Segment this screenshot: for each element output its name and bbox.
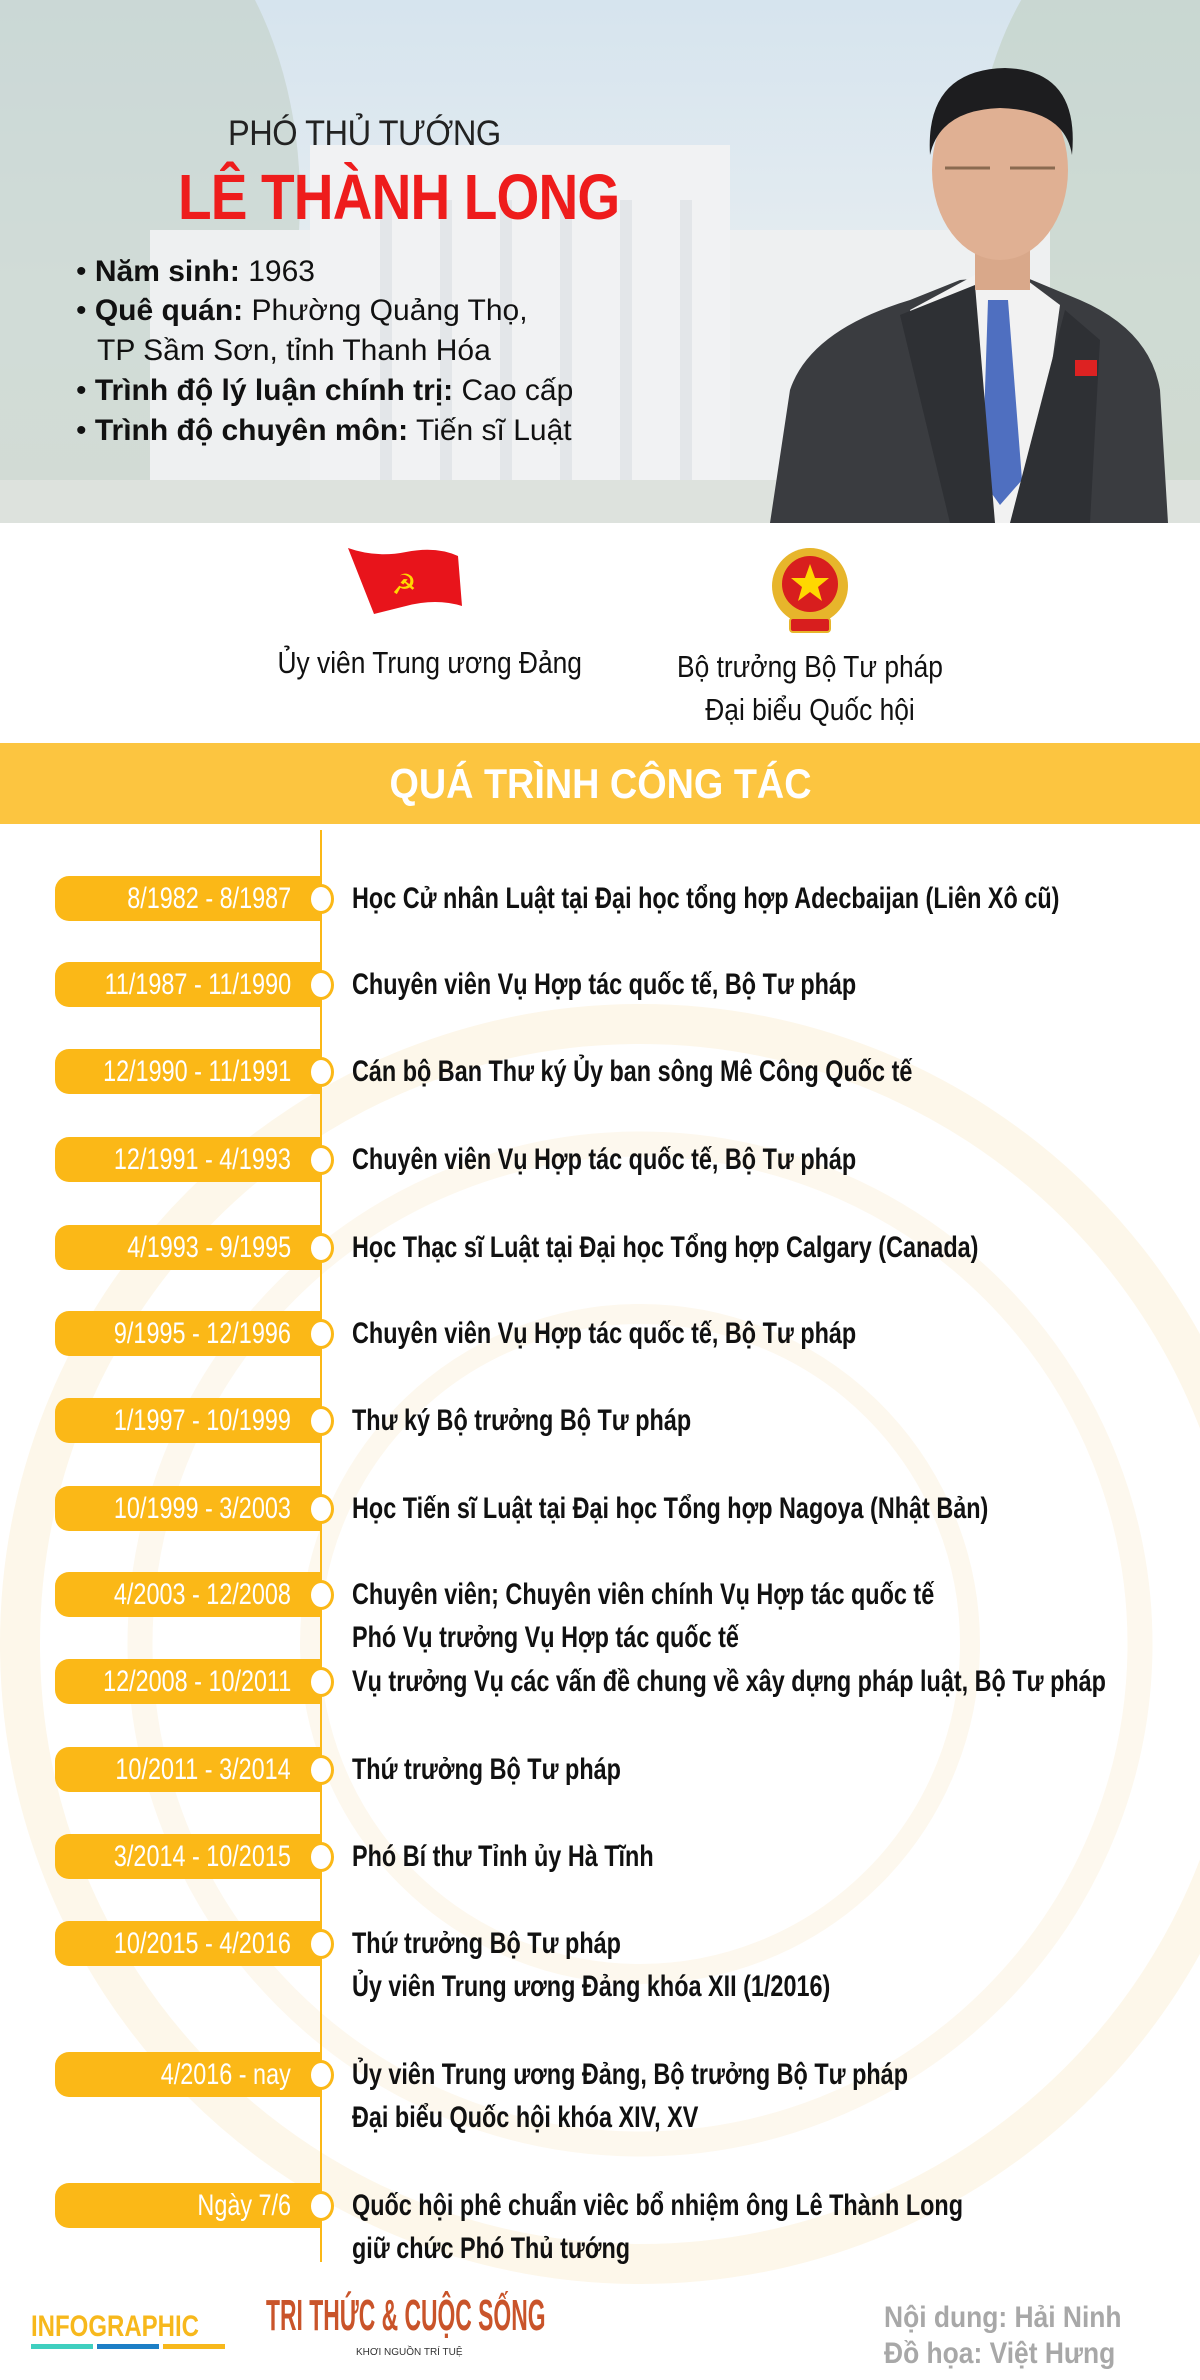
entry 1: 8/1982 - 8/1987	[127, 882, 291, 915]
entry 9: Chuyên viên; Chuyên viên chính Vụ Hợp tác quốc tế	[352, 1578, 934, 1611]
footer: infographic label: INFOGRAPHIC	[31, 2310, 199, 2343]
caption: ministry: Đại biểu Quốc hội	[705, 692, 915, 727]
entry 2	[55, 962, 856, 1007]
title name: LÊ THÀNH LONG	[178, 161, 619, 233]
entry 7: Thư ký Bộ trưởng Bộ Tư pháp	[352, 1404, 691, 1437]
entry 1	[55, 876, 1059, 921]
entry 3: 12/1990 - 11/1991	[103, 1055, 291, 1088]
subtitle: PHÓ THỦ TƯỚNG	[228, 114, 501, 153]
entry 14	[55, 2052, 908, 2134]
caption: ministry: Bộ trưởng Bộ Tư pháp	[677, 649, 943, 684]
section heading band	[0, 743, 1200, 824]
entry 8: 10/1999 - 3/2003	[114, 1492, 291, 1525]
entry 4	[55, 1137, 856, 1182]
entry 8	[55, 1486, 988, 1531]
header photo background	[0, 0, 1200, 523]
bullets: personal info: TP Sầm Sơn, tỉnh Thanh Hóa	[97, 334, 491, 367]
caption: party: Ủy viên Trung ương Đảng	[278, 645, 582, 680]
entry 7: 1/1997 - 10/1999	[114, 1404, 291, 1437]
timeline line	[320, 830, 322, 2262]
entry 14: 4/2016 - nay	[161, 2058, 291, 2091]
entry 1: Học Cử nhân Luật tại Đại học tổng hợp Adecbaijan (Liên Xô cũ)	[352, 882, 1059, 915]
entry 15	[55, 2183, 963, 2265]
icon: party flag: ☭	[391, 568, 417, 601]
entry 13	[55, 1921, 830, 2003]
entry 6	[55, 1311, 856, 1356]
entry 13: Ủy viên Trung ương Đảng khóa XII (1/2016)	[352, 1970, 830, 2003]
bullets: personal info: • Quê quán: Phường Quảng Thọ,	[76, 294, 528, 327]
entry 12: 3/2014 - 10/2015	[114, 1840, 291, 1873]
footer: credits: Nội dung: Hải Ninh	[884, 2301, 1122, 2334]
icon: national emblem	[772, 548, 848, 633]
entry 13: Thứ trưởng Bộ Tư pháp	[352, 1927, 621, 1960]
entry 5	[55, 1225, 978, 1270]
footer: credits	[884, 2301, 1122, 2370]
entry 12: Phó Bí thư Tỉnh ủy Hà Tĩnh	[352, 1840, 654, 1873]
entry 11: 10/2011 - 3/2014	[116, 1753, 291, 1786]
entry 2: Chuyên viên Vụ Hợp tác quốc tế, Bộ Tư pháp	[352, 968, 856, 1001]
entry 8: Học Tiến sĩ Luật tại Đại học Tổng hợp Nagoya (Nhật Bản)	[352, 1492, 988, 1525]
entry 11: Thứ trưởng Bộ Tư pháp	[352, 1753, 621, 1786]
bullets: personal info: • Trình độ lý luận chính trị: Cao cấp	[76, 374, 573, 407]
bullets: personal info: • Năm sinh: 1963	[76, 255, 315, 288]
footer: publication logo: TRI THỨC & CUỘC SỐNG	[266, 2291, 546, 2340]
background watermark	[0, 1004, 1200, 2284]
entry 14: Ủy viên Trung ương Đảng, Bộ trưởng Bộ Tư pháp	[352, 2058, 908, 2091]
bullets: personal info	[76, 255, 573, 447]
entry 14: Đại biểu Quốc hội khóa XIV, XV	[352, 2101, 698, 2134]
footer: credits: Đồ họa: Việt Hưng	[884, 2337, 1115, 2370]
entry 7	[55, 1398, 691, 1443]
entry 4: 12/1991 - 4/1993	[114, 1143, 291, 1176]
entry 4: Chuyên viên Vụ Hợp tác quốc tế, Bộ Tư pháp	[352, 1143, 856, 1176]
entry 15: Quốc hội phê chuẩn viêc bổ nhiệm ông Lê Thành Long	[352, 2189, 963, 2222]
entry 3: Cán bộ Ban Thư ký Ủy ban sông Mê Công Quốc tế	[352, 1055, 912, 1088]
entry 10	[55, 1659, 1106, 1704]
caption: ministry	[677, 649, 943, 727]
entry 12	[55, 1834, 654, 1879]
entry 6: 9/1995 - 12/1996	[114, 1317, 291, 1350]
entry 6: Chuyên viên Vụ Hợp tác quốc tế, Bộ Tư pháp	[352, 1317, 856, 1350]
footer: publication logo: KHƠI NGUỒN TRÍ TUỆ	[356, 2347, 463, 2358]
entry 9: 4/2003 - 12/2008	[114, 1578, 291, 1611]
entry 9: Phó Vụ trưởng Vụ Hợp tác quốc tế	[352, 1621, 739, 1654]
timeline entries	[55, 876, 1106, 2265]
entry 13: 10/2015 - 4/2016	[114, 1927, 291, 1960]
entry 5: Học Thạc sĩ Luật tại Đại học Tổng hợp Calgary (Canada)	[352, 1231, 978, 1264]
section heading band: QUÁ TRÌNH CÔNG TÁC	[389, 760, 811, 807]
icon: party flag	[348, 548, 462, 614]
portrait	[770, 68, 1168, 523]
entry 5: 4/1993 - 9/1995	[127, 1231, 291, 1264]
entry 9	[55, 1572, 934, 1654]
entry 10: 12/2008 - 10/2011	[103, 1665, 291, 1698]
entry 11	[55, 1747, 621, 1792]
bullets: personal info: • Trình độ chuyên môn: Tiến sĩ Luật	[76, 414, 572, 447]
entry 2: 11/1987 - 11/1990	[105, 968, 291, 1001]
entry 15: Ngày 7/6	[197, 2189, 291, 2222]
entry 10: Vụ trưởng Vụ các vấn đề chung về xây dựng pháp luật, Bộ Tư pháp	[352, 1665, 1106, 1698]
entry 3	[55, 1049, 912, 1094]
entry 15: giữ chức Phó Thủ tướng	[352, 2232, 630, 2265]
